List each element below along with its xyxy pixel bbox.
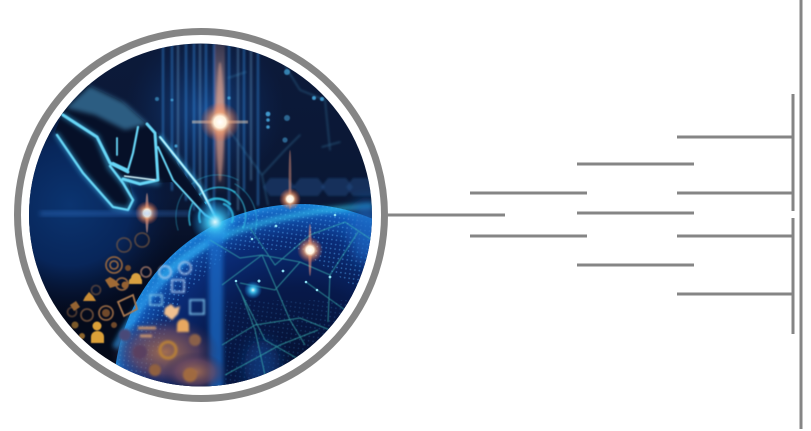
branch lines, second column — [577, 164, 694, 265]
concentric signal arcs — [176, 175, 257, 232]
light flares — [40, 62, 323, 299]
branch lines, first column — [470, 193, 587, 236]
fingertip glow — [192, 200, 237, 240]
outer grey ring — [18, 32, 384, 398]
circular technology image — [29, 43, 382, 392]
connector from circle — [388, 214, 505, 216]
circuit nodes — [155, 69, 324, 148]
blurred icons on the globe — [110, 262, 227, 392]
right vertical rule — [800, 0, 802, 429]
image background — [29, 43, 373, 387]
hexagon row — [263, 178, 378, 196]
globe — [114, 200, 382, 390]
network nodes — [235, 214, 336, 291]
vertical light beams — [163, 44, 340, 220]
orange social icons — [68, 233, 151, 343]
inner vertical brackets — [792, 94, 794, 334]
glowing hand — [55, 85, 218, 222]
network mesh — [210, 222, 372, 375]
branch lines, third column — [677, 137, 793, 294]
